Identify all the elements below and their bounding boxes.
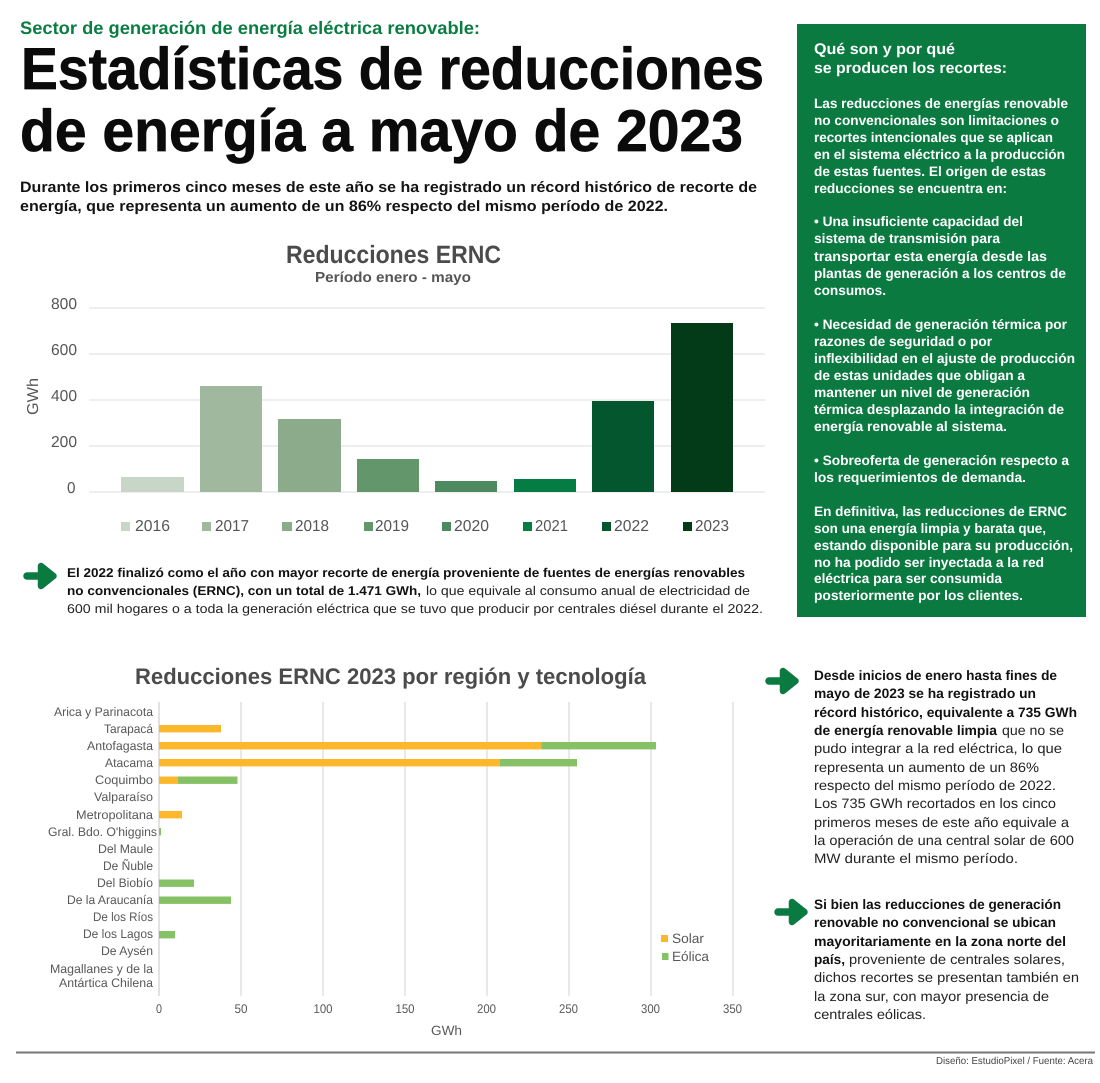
panel closing paragraph: son una energía limpia y barata que, xyxy=(814,521,1046,536)
bullet: capacidad de transmisión: transportar esta energía desde las xyxy=(814,249,1047,264)
region labels xyxy=(48,705,157,990)
panel intro paragraph: de estas fuentes. El origen de estas xyxy=(814,164,1046,179)
x axis labels xyxy=(156,1002,742,1016)
bullet: capacidad de transmisión xyxy=(814,214,1066,298)
y axis labels: 600 xyxy=(51,342,77,359)
text block: récord histórico: MW durante el mismo período. xyxy=(814,851,1018,866)
x axis labels: 100 xyxy=(314,1002,332,1016)
panel intro paragraph: en el sistema eléctrico a la producción xyxy=(814,147,1065,162)
text block: récord histórico: respecto del mismo período de 2022. xyxy=(814,778,1056,793)
title: de energía a mayo de 2023 xyxy=(20,98,743,164)
y axis labels xyxy=(51,296,77,497)
bullet: capacidad de transmisión: sistema de transmisión para xyxy=(814,231,1000,246)
text block: zona norte y sur: mayoritariamente en la zona norte del xyxy=(814,934,1066,949)
panel heading: Qué son y por qué xyxy=(814,41,955,58)
legend: 2016 xyxy=(135,518,170,535)
arrow: callout 2022 xyxy=(27,566,54,586)
panel heading: se producen los recortes: xyxy=(814,60,1007,77)
callout: 2022 record xyxy=(67,565,763,616)
callout: 2022 record: no convencionales (ERNC), con un total de 1.471 GWh, xyxy=(67,583,421,598)
text block: zona norte y sur: país, xyxy=(814,952,845,967)
region labels: De los Lagos xyxy=(83,927,153,941)
bullet: generación térmica: inflexibilidad en el ajuste de producción xyxy=(814,351,1075,366)
legend: 2020 xyxy=(454,518,489,535)
title xyxy=(20,36,764,164)
legend xyxy=(121,518,729,535)
x axis title: GWh xyxy=(431,1023,462,1038)
region labels: Arica y Parinacota xyxy=(54,705,153,719)
callout: 2022 record: 600 mil hogares o a toda la generación eléctrica que se tuvo que producir por centrales diésel durante el 2022. xyxy=(67,601,763,616)
region labels: Tarapacá xyxy=(104,722,153,736)
panel: qué son y por qué se producen los recortes xyxy=(797,24,1086,617)
bullet: generación térmica xyxy=(814,317,1075,434)
region labels: Coquimbo xyxy=(95,773,153,787)
text block: zona norte y sur: Si bien las reducciones de generación xyxy=(814,897,1061,912)
region labels: Antofagasta xyxy=(87,739,153,753)
panel closing paragraph: no ha podido ser inyectada a la red xyxy=(814,555,1044,570)
text block: récord histórico: mayo de 2023 se ha registrado un xyxy=(814,686,1036,701)
y axis labels: 0 xyxy=(67,480,76,497)
region labels: Del Biobío xyxy=(97,876,153,890)
bars xyxy=(121,323,733,492)
text block: zona norte y sur: renovable no convencional se ubican xyxy=(814,915,1056,930)
bullet: capacidad de transmisión: consumos. xyxy=(814,283,886,298)
region labels: Gral. Bdo. O'higgins xyxy=(48,825,157,839)
intro text xyxy=(20,179,757,215)
x axis labels: 200 xyxy=(477,1002,496,1016)
legend: Eólica xyxy=(672,949,709,964)
region labels: Metropolitana xyxy=(76,808,153,822)
y axis labels: 800 xyxy=(51,296,77,313)
text block: récord histórico: Los 735 GWh recortados en los cinco xyxy=(814,796,1056,811)
region labels: De Ñuble xyxy=(103,859,153,873)
bullet: sobreoferta: • Sobreoferta de generación respecto a xyxy=(814,453,1069,468)
legend: 2019 xyxy=(375,518,409,535)
chart: Reducciones ERNC enero-mayo xyxy=(25,241,765,535)
text block: récord histórico: la operación de una central solar de 600 xyxy=(814,833,1074,848)
chart title: Reducciones ERNC xyxy=(286,241,501,269)
chart title: Reducciones ERNC 2023 por región y tecnología xyxy=(135,664,646,689)
panel heading xyxy=(814,41,1007,77)
title: Estadísticas de reducciones xyxy=(21,36,764,102)
bullet: generación térmica: de estas unidades que obligan a xyxy=(814,368,1025,383)
x axis labels: 150 xyxy=(396,1002,414,1016)
bullet: generación térmica: razones de seguridad o por xyxy=(814,334,993,349)
bullet: sobreoferta: los requerimientos de demanda. xyxy=(814,470,1026,485)
bullet: generación térmica: energía renovable al sistema. xyxy=(814,419,1007,434)
panel closing paragraph xyxy=(814,504,1073,603)
panel intro paragraph: recortes intencionales que se aplican xyxy=(814,130,1053,145)
x axis labels: 300 xyxy=(641,1002,660,1016)
arrow: zona norte xyxy=(778,902,804,922)
bullet: sobreoferta xyxy=(814,453,1069,485)
panel intro paragraph xyxy=(814,96,1068,196)
panel closing paragraph: posteriormente por los clientes. xyxy=(814,588,1023,603)
y axis labels: 200 xyxy=(51,434,77,451)
text block: zona norte y sur: centrales eólicas. xyxy=(814,1007,926,1022)
legend: Solar xyxy=(672,931,705,946)
region labels: Antártica Chilena xyxy=(59,976,153,990)
header: eyebrow: Sector de generación de energía eléctrica renovable: xyxy=(20,18,480,38)
legend: 2018 xyxy=(295,518,329,535)
text block: zona norte y sur xyxy=(814,897,1079,1022)
legend xyxy=(661,931,709,964)
legend: 2017 xyxy=(215,518,249,535)
region labels: Atacama xyxy=(105,756,153,770)
intro text: Durante los primeros cinco meses de este año se ha registrado un récord histórico de recorte de xyxy=(20,179,757,196)
bullet: generación térmica: térmica desplazando la integración de xyxy=(814,402,1064,417)
x axis labels: 50 xyxy=(234,1002,248,1016)
y axis title: GWh xyxy=(25,378,42,415)
stacked bars solar and eólica xyxy=(159,725,656,938)
text block: zona norte y sur: dichos recortes se presentan también en xyxy=(814,970,1079,985)
legend: 2023 xyxy=(695,518,729,535)
region labels: De los Ríos xyxy=(93,910,153,924)
region labels: Magallanes y de la xyxy=(50,962,153,976)
region labels: De la Araucanía xyxy=(67,893,153,907)
panel closing paragraph: eléctrica para ser consumida xyxy=(814,571,1002,586)
legend: 2022 xyxy=(614,518,649,535)
chart: Reducciones ERNC 2023 por región y tecnología xyxy=(48,664,742,1038)
text block: récord histórico xyxy=(814,668,1077,866)
panel intro paragraph: Las reducciones de energías renovable xyxy=(814,96,1068,111)
text block: récord histórico: pudo integrar a la red eléctrica, lo que xyxy=(814,741,1062,756)
text block: récord histórico: Desde inicios de enero hasta fines de xyxy=(814,668,1057,683)
chart subtitle: Período enero - mayo xyxy=(315,270,471,286)
text block: récord histórico: de energía renovable limpia xyxy=(814,723,997,738)
text block: zona norte y sur: la zona sur, con mayor presencia de xyxy=(814,989,1049,1004)
text block: récord histórico: récord histórico, equivalente a 735 GWh xyxy=(814,705,1077,720)
footer credit: Diseño: EstudioPixel / Fuente: Acera xyxy=(936,1056,1093,1067)
panel closing paragraph: En definitiva, las reducciones de ERNC xyxy=(814,504,1067,519)
x axis labels: 350 xyxy=(723,1002,742,1016)
region labels: De Aysén xyxy=(101,944,153,958)
arrow: récord 735 GWh xyxy=(769,671,796,691)
panel closing paragraph: estando disponible para su producción, xyxy=(814,538,1073,553)
y axis labels: 400 xyxy=(51,388,77,405)
text block: récord histórico: que no se xyxy=(1002,723,1064,738)
panel intro paragraph: no convencionales son limitaciones o xyxy=(814,113,1059,128)
text block: zona norte y sur: proveniente de centrales solares, xyxy=(849,952,1065,967)
bullet: capacidad de transmisión: plantas de generación a los centros de xyxy=(814,266,1066,281)
callout: 2022 record: lo que equivale al consumo anual de electricidad de xyxy=(426,583,750,598)
x axis labels: 250 xyxy=(559,1002,578,1016)
legend: 2021 xyxy=(535,518,568,535)
region labels: Del Maule xyxy=(98,842,153,856)
bullet: capacidad de transmisión: • Una insuficiente capacidad del xyxy=(814,214,1023,229)
region labels: Valparaíso xyxy=(94,790,153,804)
callout: 2022 record: El 2022 finalizó como el año con mayor recorte de energía proveniente de fuentes de energías renovables xyxy=(67,565,745,580)
bullet: generación térmica: • Necesidad de generación térmica por xyxy=(814,317,1068,332)
x axis labels: 0 xyxy=(156,1002,162,1016)
text block: récord histórico: primeros meses de este año equivale a xyxy=(814,815,1069,830)
panel intro paragraph: reducciones se encuentra en: xyxy=(814,181,1007,196)
intro text: energía, que representa un aumento de un 86% respecto del mismo período de 2022. xyxy=(20,198,668,215)
bullet: generación térmica: mantener un nivel de generación xyxy=(814,385,1030,400)
text block: récord histórico: representa un aumento de un 86% xyxy=(814,760,1039,775)
